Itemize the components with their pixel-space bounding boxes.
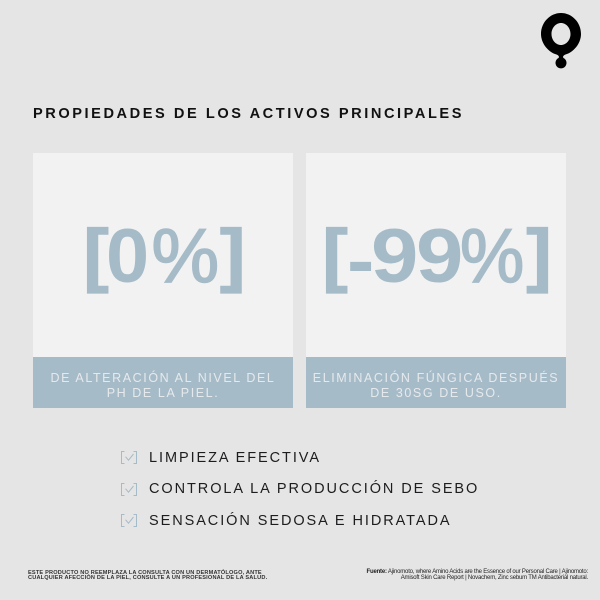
benefit list	[121, 450, 479, 529]
title: PROPIEDADES DE LOS ACTIVOS PRINCIPALES	[33, 106, 464, 122]
icon: check 1	[121, 451, 137, 464]
big number: -99%: %	[460, 214, 524, 299]
disclaimer	[28, 569, 267, 581]
caption: fungal	[313, 370, 559, 400]
big number: -99%: 9	[416, 214, 463, 299]
big number: 0%: [	[83, 215, 109, 294]
source note: Fuente: Ajinomoto, where Amino Acids are the Essence of our Personal Care | Ajinomoto:	[367, 569, 588, 575]
big number: -99%: ]	[526, 215, 552, 294]
benefit 3: SENSACIÓN SEDOSA E HIDRATADA	[149, 513, 451, 529]
big number: -99%: [	[322, 215, 348, 294]
big number: 0%: 0	[106, 214, 149, 299]
caption: pH: DE ALTERACIÓN AL NIVEL DEL	[50, 371, 275, 385]
panel: -99% card	[306, 153, 566, 408]
icon: check 2	[121, 483, 137, 496]
big number: -99%: 9	[370, 214, 418, 299]
big number: 0%: ]	[220, 215, 245, 294]
disclaimer: ESTE PRODUCTO NO REEMPLAZA LA CONSULTA CON UN DERMATÓLOGO, ANTE	[28, 570, 262, 576]
source note	[366, 568, 588, 581]
big number: -99%	[322, 214, 552, 303]
benefit 1: LIMPIEZA EFECTIVA	[149, 450, 321, 466]
big number: 0%: %	[152, 214, 219, 299]
logo: drop ring	[541, 13, 581, 68]
caption: pH	[50, 370, 275, 400]
big number: -99%: -	[346, 218, 374, 303]
big number: 0%	[83, 214, 245, 299]
caption: fungal: ELIMINACIÓN FÚNGICA DESPUÉS	[313, 371, 559, 385]
panel: 0% card	[33, 153, 293, 408]
caption: fungal: DE 30SG DE USO.	[370, 386, 502, 400]
caption: pH: PH DE LA PIEL.	[107, 386, 219, 400]
source note: Amisoft Skin Care Report | Novachem, Zinc sebum TM Antibacterial natural.	[401, 575, 588, 581]
benefit 2: CONTROLA LA PRODUCCIÓN DE SEBO	[149, 481, 479, 497]
icon: check 3	[121, 514, 137, 527]
disclaimer: CUALQUIER AFECCIÓN DE LA PIEL, CONSULTE A UN PROFESIONAL DE LA SALUD.	[28, 575, 267, 581]
